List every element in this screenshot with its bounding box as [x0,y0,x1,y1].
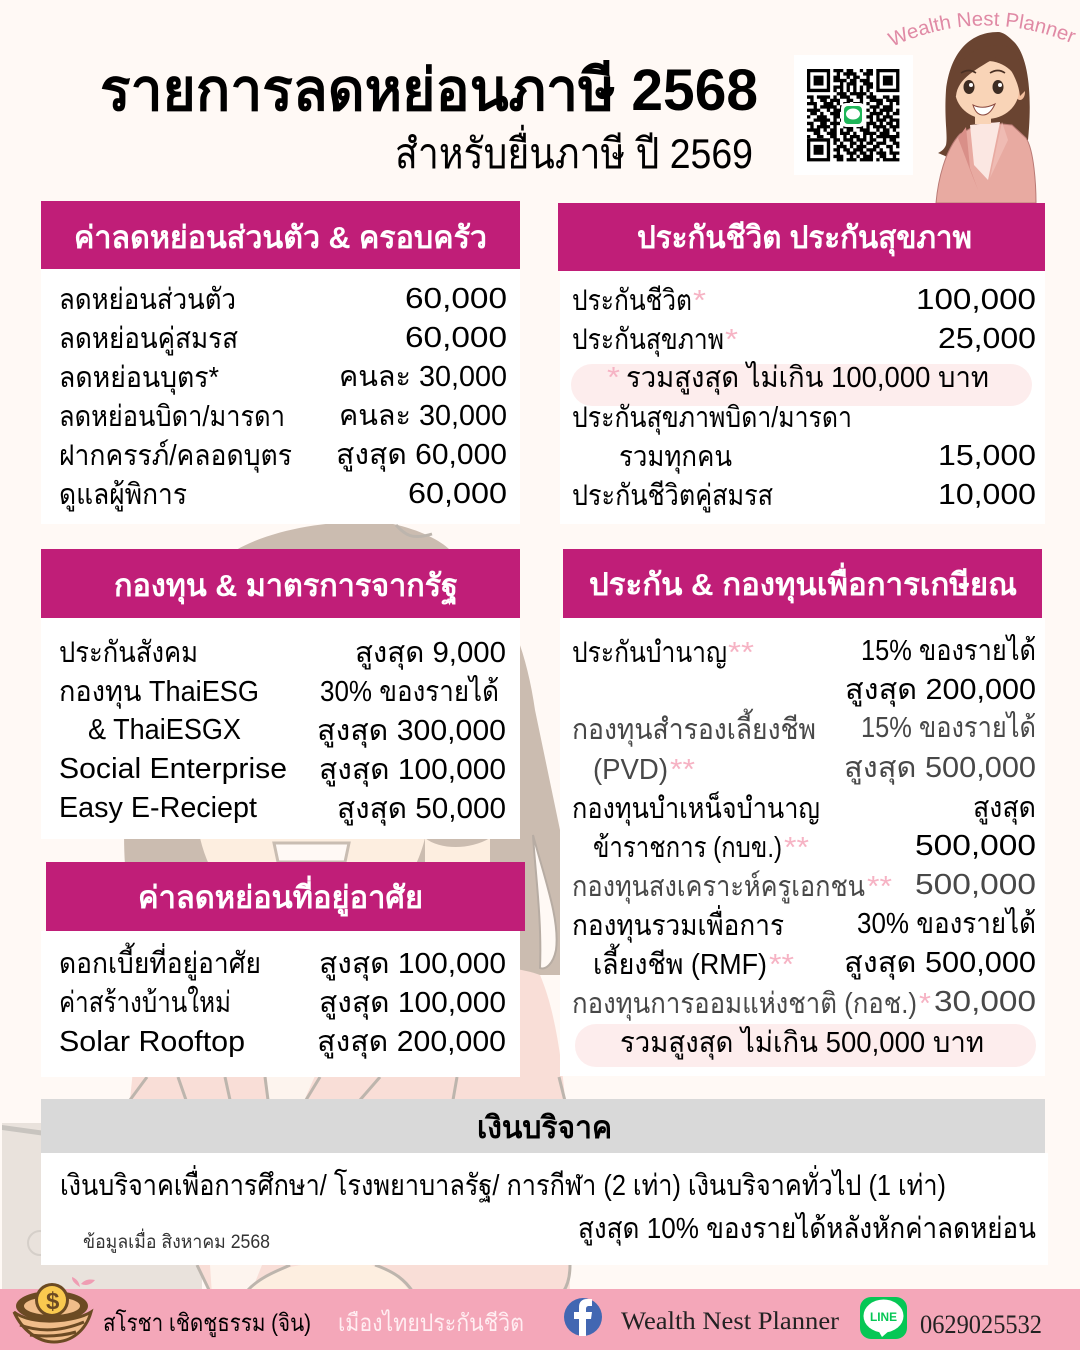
list rows: กองทุนการออมแห่งชาติ (กอช.) [572,988,917,1021]
panel: funds and state measures [41,549,520,839]
list rows: ฝากครรภ์/คลอดบุตร [59,439,292,473]
brand name curved text: Wealth Nest Planner [886,12,1076,46]
list rows: ** [670,754,695,786]
list rows: สูงสุด 500,000 [844,752,1036,785]
author name: สโรชา เชิดชูธรรม (จิน) [103,1309,311,1338]
list rows: กองทุน ThaiESG [59,676,259,709]
heading: ประกัน & กองทุนเพื่อการเกษียณ [589,562,1017,604]
list rows: 30% ของรายได้ [320,674,499,708]
list rows: 500,000 [915,869,1036,901]
list rows: ประกันบำนาญ [572,637,727,669]
list rows: กองทุนรวมเพื่อการ [572,905,784,943]
data date note: ข้อมูลเมื่อ สิงหาคม 2568 [83,1228,270,1253]
heading: ประกันชีวิต ประกันสุขภาพ [637,220,972,257]
list rows: สูงสุด 100,000 [319,987,506,1020]
callout: insurance cap: รวมสูงสุด ไม่เกิน 100,000 บาท [626,360,989,395]
company name: เมืองไทยประกันชีวิต [338,1309,524,1337]
list rows: สูงสุด [973,792,1036,825]
panel: retirement insurance and funds [560,549,1045,1076]
list rows: ค่าสร้างบ้านใหม่ [59,985,231,1019]
donation text: เงินบริจาคเพื่อการศึกษา/ โรงพยาบาลรัฐ/ การกีฬา (2 เท่า) เงินบริจาคทั่วไป (1 เท่า) [60,1165,946,1203]
list rows: คนละ 30,000 [339,400,507,432]
heading: กองทุน & มาตรการจากรัฐ [114,568,458,606]
list rows: สูงสุด 100,000 [319,948,506,981]
callout: retirement cap: รวมสูงสุด ไม่เกิน 500,000 บาท [620,1025,984,1060]
list rows: * [693,285,706,317]
list rows: 60,000 [408,478,507,510]
list rows [59,942,506,1059]
heading [563,549,1042,618]
list rows: กองทุนบำเหน็จบำนาญ [572,790,820,826]
heading: ค่าลดหย่อนที่อยู่อาศัย [138,875,423,917]
icon: LINE [860,1297,907,1339]
list rows: 25,000 [938,323,1036,355]
icon: facebook [564,1298,602,1336]
list rows: คนละ 30,000 [339,361,507,393]
heading [41,201,520,269]
footer bar [0,1277,1080,1350]
phone number: 0629025532 [920,1310,1042,1339]
list rows: 15,000 [938,440,1036,472]
heading [41,549,520,618]
list rows: ดอกเบี้ยที่อยู่อาศัย [59,942,261,981]
list rows: สูงสุด 60,000 [336,439,507,472]
subtitle: สำหรับยื่นภาษี ปี 2569 [395,125,753,177]
callout: retirement cap [575,1024,1036,1067]
list rows: Easy E-Reciept [59,792,257,824]
list rows: 500,000 [915,830,1036,862]
list rows [59,283,507,512]
list rows: สูงสุด 9,000 [355,637,506,670]
panel: personal and family deductions [41,201,520,524]
heading [46,862,525,931]
list rows: 10,000 [938,479,1036,511]
list rows: * [725,324,738,356]
list rows: สูงสุด 200,000 [317,1026,506,1059]
list rows: ลดหย่อนบิดา/มารดา [59,401,285,433]
list rows [572,284,1036,513]
list rows: รวมทุกคน [619,441,732,474]
icon: nest with coin [14,1277,95,1342]
list rows: & ThaiESGX [88,714,241,746]
QR code to LINE account [794,55,913,175]
heading: เงินบริจาค [477,1110,612,1145]
list rows: 60,000 [405,283,507,315]
list rows: * [919,988,931,1020]
title: รายการลดหย่อนภาษี 2568 [100,58,758,123]
list rows: ประกันสุขภาพบิดา/มารดา [572,402,852,435]
list rows: 60,000 [405,322,507,354]
heading: ค่าลดหย่อนส่วนตัว & ครอบครัว [74,220,487,255]
heading [41,1099,1045,1153]
list rows: กองทุนสงเคราะห์ครูเอกชน [572,870,865,904]
list rows: 15% ของรายได้ [861,710,1036,744]
list rows: เลี้ยงชีพ (RMF) [593,943,767,981]
list rows: ** [867,871,892,903]
list rows: ** [769,949,794,981]
list rows: สูงสุด 500,000 [844,947,1036,980]
list rows: Solar Rooftop [59,1026,245,1058]
list rows: Social Enterprise [59,753,287,785]
list rows: ** [784,832,809,864]
list rows: ประกันสุขภาพ [572,324,724,357]
list rows: ลดหย่อนคู่สมรส [59,323,238,356]
list rows: กองทุนสำรองเลี้ยงชีพ [572,708,816,747]
icon: LINE: LINE [870,1310,897,1324]
list rows: ลดหย่อนส่วนตัว [59,284,236,316]
list rows: สูงสุด 50,000 [337,793,506,826]
panel: housing deductions [41,862,525,1077]
list rows: ข้าราชการ (กบข.) [593,832,782,864]
mascot portrait [936,32,1036,203]
list rows: สูงสุด 100,000 [319,754,506,787]
list rows: 30,000 [934,986,1036,1018]
list rows: ลดหย่อนบุตร* [59,362,219,395]
heading [558,203,1045,271]
list rows: ประกันสังคม [59,637,198,669]
list rows: ประกันชีวิต [572,285,692,317]
list rows: ** [728,637,754,669]
list rows [59,637,506,826]
list rows: สูงสุด 200,000 [845,674,1036,707]
facebook page name: Wealth Nest Planner [621,1308,840,1335]
list rows: ดูแลผู้พิการ [59,479,187,512]
list rows: 15% ของรายได้ [861,633,1036,667]
faded mascot illustration in background [2,522,570,1295]
callout: insurance cap [571,360,1032,406]
list rows [572,633,1036,1021]
list rows: 100,000 [916,284,1036,316]
list rows: 30% ของรายได้ [857,906,1036,940]
panel: donations [41,1099,1048,1265]
icon: nest with coin: $ [46,1288,60,1315]
list rows: ประกันชีวิตคู่สมรส [572,480,773,513]
donation limit: สูงสุด 10% ของรายได้หลังหักค่าลดหย่อน [578,1211,1036,1246]
list rows: (PVD) [593,754,668,786]
callout: insurance cap: * [607,362,620,394]
list rows: สูงสุด 300,000 [317,715,506,748]
panel: life and health insurance [558,203,1045,524]
